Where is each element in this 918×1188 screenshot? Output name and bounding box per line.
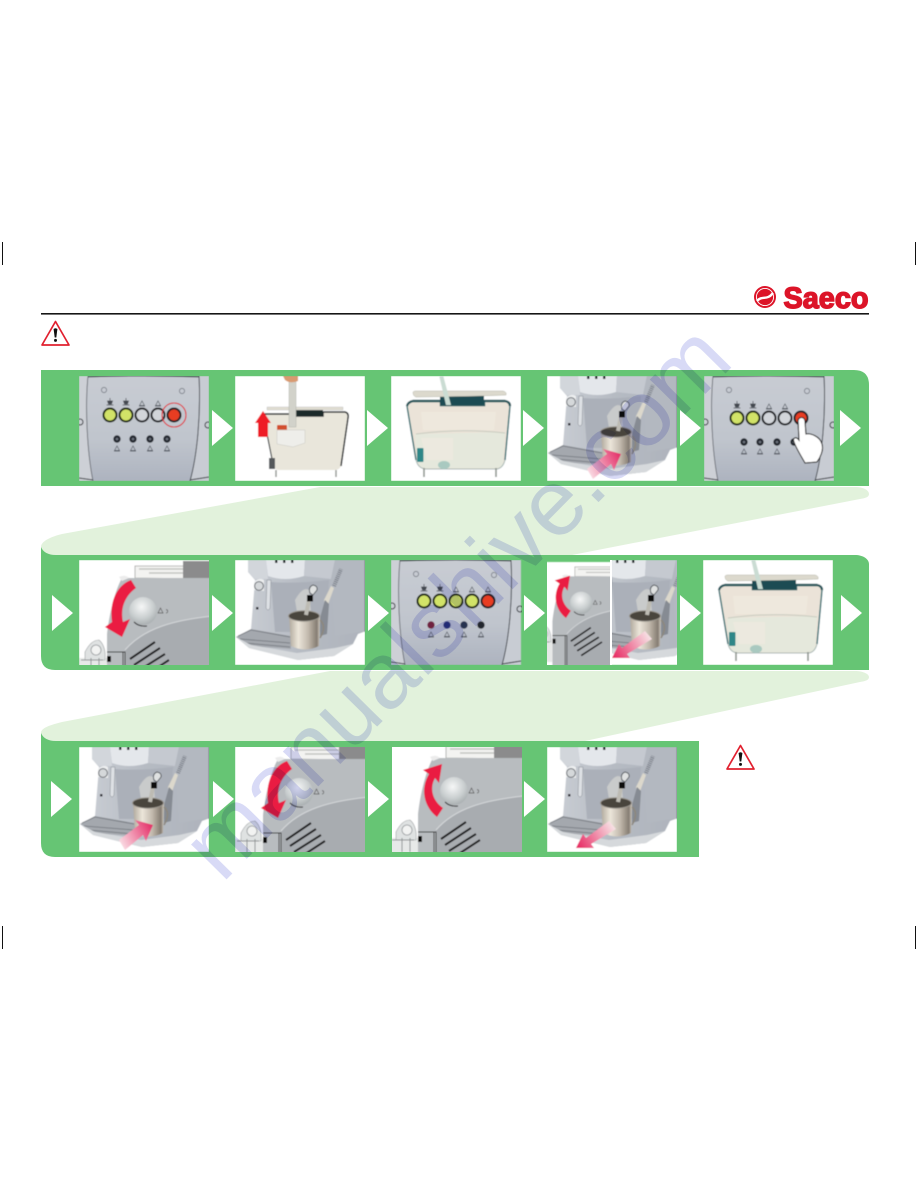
pale connector band 1 [41, 487, 869, 555]
photo: lifting filter out of tank with red arrow [235, 376, 365, 481]
photo: dial turned down [235, 747, 365, 852]
photo: control panel with circled red light [79, 376, 209, 481]
arrow [368, 595, 389, 631]
warning icon lower right [727, 746, 754, 769]
warning icon top [42, 322, 69, 345]
watermark: manualshive.com [161, 304, 750, 898]
step row 3 [41, 733, 699, 881]
arrow [213, 781, 234, 817]
arrow [523, 410, 544, 446]
photo: dial turned down [79, 560, 209, 665]
crop mark bottom right [915, 926, 916, 949]
green band row 1 [41, 370, 869, 486]
photo: finger pressing button [704, 376, 834, 481]
Saeco logo: Saeco [784, 282, 868, 315]
step row 1 [41, 370, 869, 486]
photo: control panel all lights on [391, 560, 522, 665]
crop mark bottom left [2, 926, 3, 949]
arrow [524, 781, 545, 817]
pale connector band 2 [41, 671, 869, 741]
photo: dial turned up [392, 747, 522, 852]
green band row 3 [41, 733, 699, 857]
arrow [212, 595, 233, 631]
photo: water tank [703, 560, 833, 665]
photo: machine with cup pulled out [547, 747, 677, 852]
photo: water tank [391, 376, 521, 481]
step row 2 [41, 547, 869, 700]
arrow [524, 595, 545, 631]
arrow [680, 410, 701, 446]
green band row 2 [41, 547, 869, 670]
arrow [367, 410, 388, 446]
photo: machine with cup [235, 560, 365, 665]
arrow [680, 595, 701, 631]
photo: machine with cup and pink arrow [547, 376, 677, 481]
arrow [51, 781, 72, 817]
crop mark top left [2, 242, 3, 265]
photo: dial back up and cup removed, split image [530, 560, 707, 674]
arrow [212, 410, 233, 446]
arrow [52, 595, 73, 631]
header rule [41, 313, 869, 315]
photo: machine with cup pushed in [79, 747, 209, 852]
arrow [368, 781, 389, 817]
crop mark top right [915, 242, 916, 265]
arrow [840, 410, 861, 446]
arrow [841, 595, 862, 631]
